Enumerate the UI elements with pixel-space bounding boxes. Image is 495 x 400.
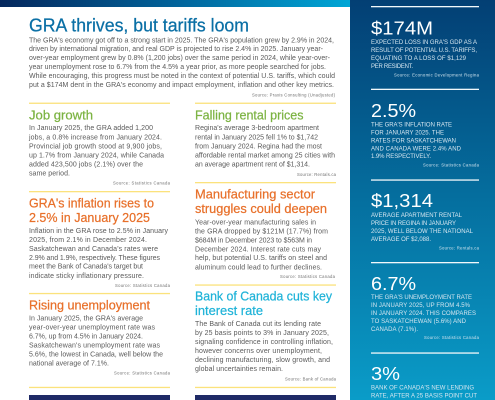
top gradient bar	[0, 0, 350, 7]
rental source: Source: Rentals.ca	[297, 172, 337, 177]
job growth body: up 1.7% from January 2024, while Canada	[29, 152, 164, 160]
unemployment body: Saskatchewan's unemployment rate was	[29, 342, 160, 350]
stat: $174M: $174M	[371, 18, 433, 38]
heading: falling rental prices: Falling rental prices	[195, 108, 304, 122]
stat: $174M: Source: Economic Development Regina	[394, 72, 480, 77]
job growth body: same period.	[29, 170, 70, 178]
job growth body: jobs, a 0.8% increase from January 2024.	[28, 134, 162, 142]
heading: job growth: Job growth	[29, 108, 93, 122]
bank of canada body	[195, 321, 333, 373]
intro text block: put a $174M dent in the GRA's economy and impact employment, inflation and other key metrics.	[29, 82, 334, 89]
inflation body	[29, 228, 168, 280]
bank of canada source: Source: Bank of Canada	[285, 376, 337, 381]
unemployment body: 6.7%, up from 4.5% in January 2024.	[29, 334, 143, 340]
stat: 2.5%: AND CANADA WERE 2.4% AND	[371, 146, 462, 152]
intro text block: While encouraging, this progress must be noted in the context of potential U.S. tariffs, which could	[29, 73, 335, 80]
heading: manufacturing	[195, 188, 327, 216]
heading: bank of canada: Bank of Canada cuts key	[195, 290, 333, 304]
unemployment body: year-over-year unemployment rate was	[29, 324, 156, 332]
job growth body	[28, 125, 164, 178]
manufacturing body: the GRA dropped by $121M (17.7%) from	[195, 228, 328, 236]
heading: manufacturing: struggles could deepen	[195, 202, 327, 216]
panel: bank of canada	[195, 290, 337, 381]
bank of canada body: however concerns over unemployment,	[195, 348, 322, 355]
panel: job growth	[28, 108, 171, 185]
job growth body: Provincial job growth stood at 9,900 jobs,	[29, 144, 162, 150]
stat: 2.5%: 1.9% RESPECTIVELY.	[371, 154, 431, 160]
stat: $174M: RESULT OF POTENTIAL U.S. TARIFFS,	[371, 48, 477, 54]
rental body: an average apartment rent of $1,314.	[195, 162, 310, 168]
heading: rising unemployment: Rising unemployment	[29, 298, 151, 312]
bank of canada body: global uncertainties remain.	[195, 366, 283, 373]
stat: 2.5%: FOR JANUARY 2025. THE	[371, 130, 444, 136]
intro text block: year unemployment rose to 6.7% from the 4.5% a year prior, as more people searched for jobs.	[29, 64, 326, 71]
bank of canada body: by 25 basis points to 3% in January 2025,	[195, 330, 329, 337]
stat: 6.7%	[371, 274, 480, 340]
stat: $1,314: PRICE IN REGINA IN JANUARY	[371, 221, 456, 227]
unemployment body: national average of 7.1%.	[29, 360, 109, 368]
stat: $1,314: 2025, WELL BELOW THE NATIONAL	[371, 229, 474, 235]
manufacturing body: aluminum could lead to further declines.	[195, 264, 322, 272]
stat: $174M	[371, 18, 480, 77]
heading: bank of canada	[195, 290, 333, 318]
intro text block: over-year employment grew by 0.8% (1,200 jobs) over the same period in 2024, while year-over-	[29, 55, 331, 62]
stat: 2.5%: RATES FOR SASKATCHEWAN	[371, 138, 456, 144]
stat: 2.5%: Source: Statistics Canada	[423, 162, 480, 167]
stat: 2.5%: 2.5%	[371, 101, 416, 121]
panel: key statistics sidebar background	[350, 0, 495, 400]
bottom dark image strip right	[195, 395, 336, 400]
heading: manufacturing: Manufacturing sector	[195, 188, 315, 202]
manufacturing source: Source: Statistics Canada	[280, 274, 336, 279]
stat: 2.5%	[371, 101, 480, 167]
stat: 6.7%: THE GRA'S UNEMPLOYMENT RATE	[371, 295, 472, 301]
title: GRA thrives, but tariffs loom	[29, 15, 249, 36]
stat: 2.5%: THE GRA'S INFLATION RATE	[371, 122, 452, 128]
panel: rising unemployment	[29, 298, 171, 375]
job growth source: Source: Statistics Canada	[113, 180, 171, 185]
bottom dark image strip left	[29, 395, 170, 400]
unemployment body	[29, 316, 163, 368]
panel: inflation	[29, 196, 171, 288]
rental body: rental in January 2025 fell 1% to $1,742	[195, 134, 318, 142]
heading: bank of canada: interest rate	[195, 304, 263, 318]
inflation body: Saskatchewan and Canada's rates were	[29, 246, 158, 253]
stat: $174M: EXPECTED LOSS IN GRA'S GDP AS A	[371, 40, 477, 46]
inflation body: 2025, from 2.1% in December 2024.	[29, 237, 147, 244]
rental body: Regina's average 3-bedroom apartment	[195, 125, 319, 132]
stat: 6.7%: CANADA (7.1%).	[371, 327, 418, 333]
panel: manufacturing	[195, 188, 336, 279]
intro text block: driven by international migration, and real GDP is projected to rise 2.4% in 2025. January year-	[29, 46, 324, 53]
job growth body: added 423,500 jobs (2.1%) over the	[29, 162, 143, 168]
stat: $1,314	[371, 191, 480, 250]
intro source: Source: Praxis Consulting (Unadjusted)	[252, 92, 336, 97]
stat: $174M: PER RESIDENT.	[371, 64, 413, 70]
manufacturing body: $684M in December 2023 to $563M in	[195, 238, 312, 244]
rental body: affordable rental market among 25 cities with	[195, 152, 335, 160]
unemployment body: In January 2025, the GRA's average	[29, 316, 143, 322]
stat: $1,314: AVERAGE APARTMENT RENTAL	[371, 213, 463, 219]
stat: $1,314: Source: Rentals.ca	[439, 245, 480, 250]
stat: 6.7%: Source: Statistics Canada	[424, 335, 480, 340]
stat: $1,314: $1,314	[371, 191, 433, 211]
stat: $174M: EQUATING TO A LOSS OF $1,129	[371, 56, 467, 62]
inflation body: meet the Bank of Canada's target but	[29, 264, 143, 271]
manufacturing body: December 2024. Interest rate cuts may	[195, 246, 322, 254]
stat: 6.7%: TO SASKATCHEWAN (5.6%) AND	[371, 319, 467, 325]
rental body: from January 2024. Regina had the most	[195, 144, 322, 150]
stat: 6.7%: IN JANUARY 2025, UP FROM 4.5%	[371, 303, 471, 309]
stat: 3%: 3%	[371, 364, 400, 384]
intro text block	[29, 38, 335, 89]
unemployment body: 5.6%, the lowest in Canada, well below the	[29, 352, 163, 358]
manufacturing body	[195, 220, 328, 272]
stat: 6.7%: 6.7%	[371, 274, 416, 294]
bank of canada body: declining manufacturing, slow growth, and	[195, 357, 330, 364]
manufacturing body: help, but potential U.S. tariffs on steel and	[195, 255, 327, 262]
stat: $1,314: AVERAGE OF $2,088.	[371, 237, 431, 243]
job growth body: In January 2025, the GRA added 1,200	[29, 125, 153, 132]
unemployment source: Source: Statistics Canada	[114, 370, 171, 375]
panel: falling rental prices	[195, 108, 337, 177]
stat: 3%: BANK OF CANADA'S NEW LENDING	[371, 386, 474, 392]
bank of canada body: signaling confidence in controlling inflation,	[195, 339, 333, 346]
heading: inflation	[29, 196, 154, 225]
bank of canada body: The Bank of Canada cut its lending rate	[195, 321, 321, 328]
stat: 3%: RATE, AFTER A 25 BASIS POINT CUT	[371, 394, 477, 400]
stat: 3%	[371, 364, 477, 400]
inflation body: 2.9% and 1.9%, respectively. These figures	[29, 255, 160, 262]
inflation body: Inflation in the GRA rose to 2.5% in January	[29, 228, 168, 235]
heading: inflation: GRA's inflation rises to	[29, 196, 154, 210]
intro text block: The GRA's economy got off to a strong start in 2025. The GRA's population grew by 2.9% in 2024,	[29, 38, 334, 44]
stat: 6.7%: IN JANUARY 2024. THIS COMPARES	[371, 311, 476, 317]
rental body	[195, 125, 335, 168]
inflation source: Source: Statistics Canada	[115, 283, 171, 288]
manufacturing body: Year-over-year manufacturing sales in	[195, 220, 316, 226]
inflation body: indicate sticky inflationary pressure.	[29, 273, 144, 280]
heading: inflation: 2.5% in January 2025	[29, 211, 150, 225]
